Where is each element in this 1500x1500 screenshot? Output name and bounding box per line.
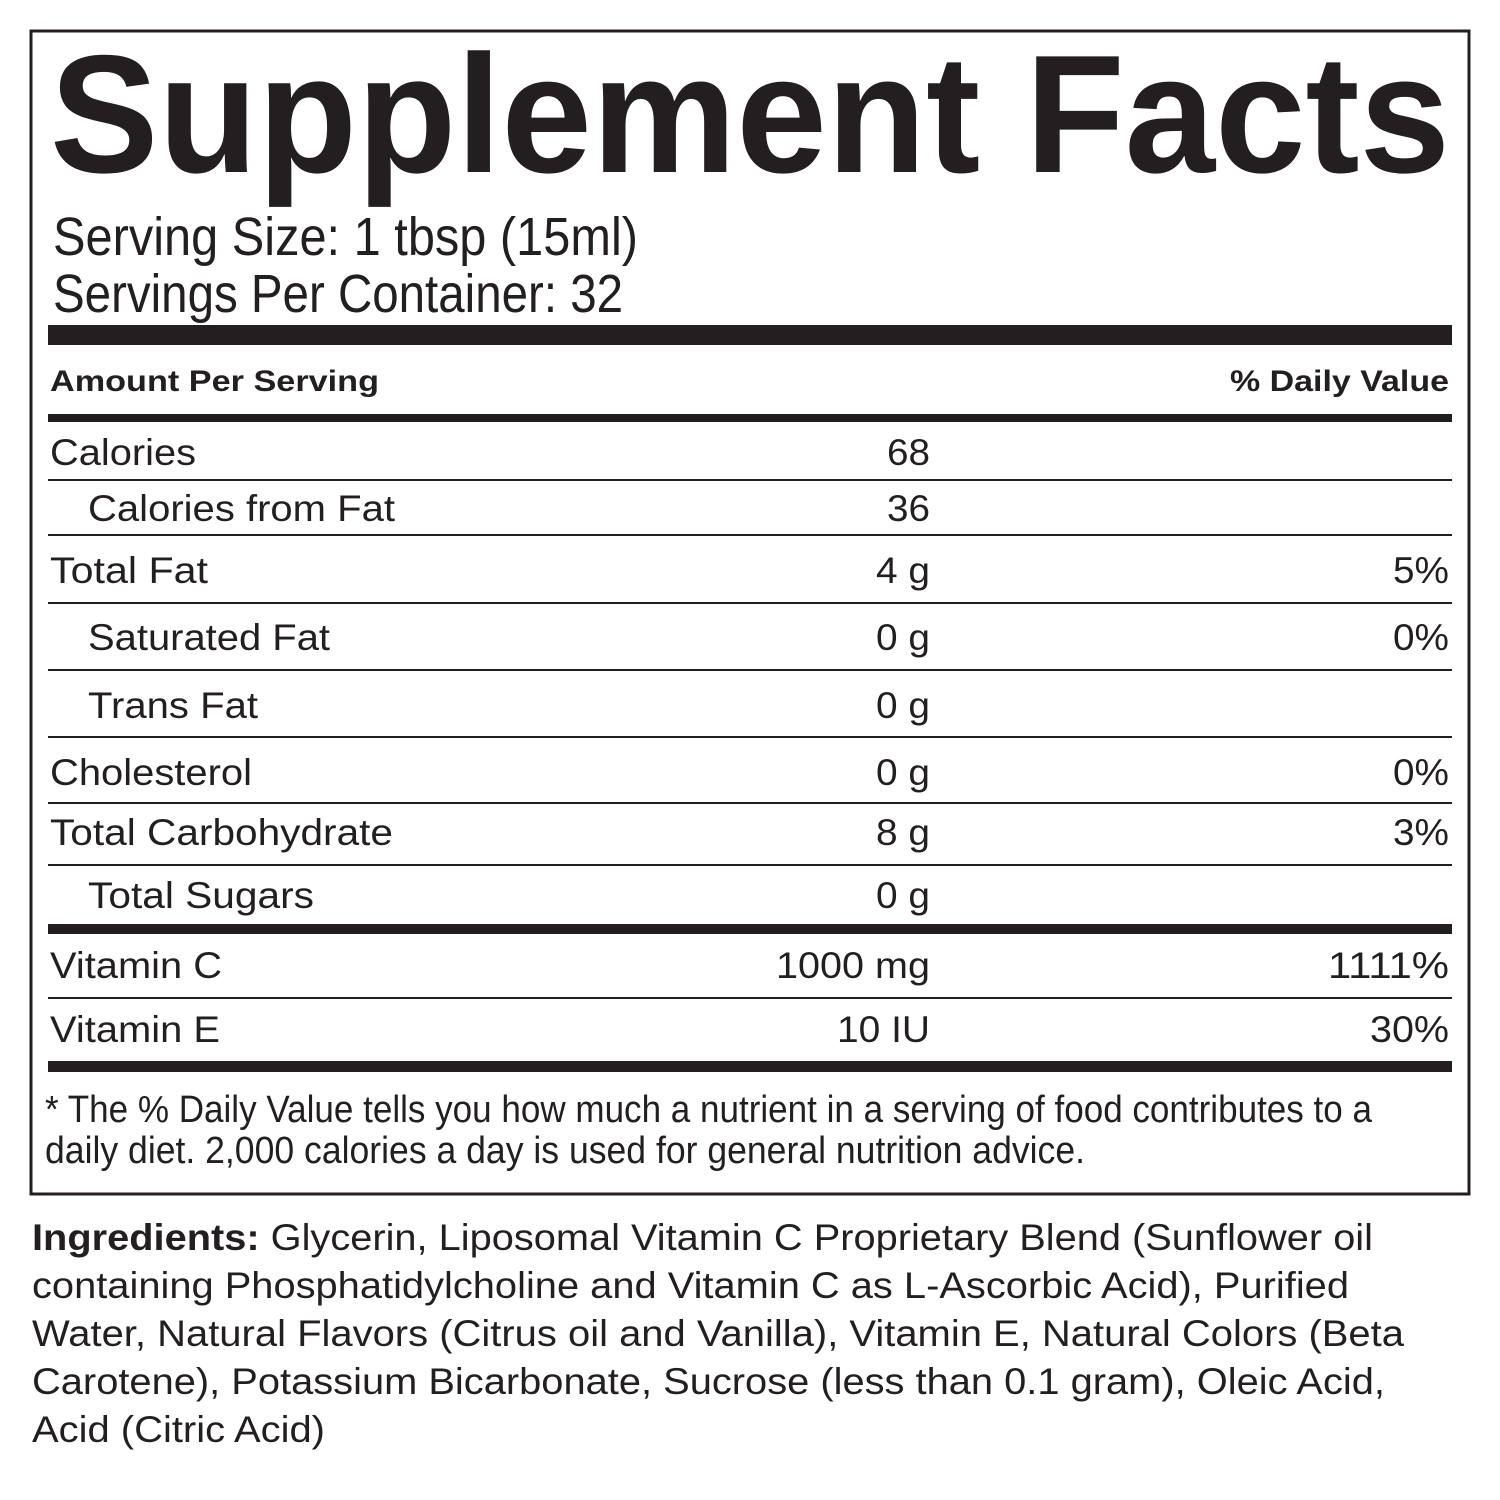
ingredients text: Carotene), Potassium Bicarbonate, Sucrose (less than 0.1 gram), Oleic Acid,: [32, 1361, 1385, 1402]
nutrient table: Total Carbohydrate: [50, 812, 393, 853]
nutrient table: 0 g: [876, 617, 930, 658]
column headers: Amount Per Serving: [50, 365, 379, 398]
ingredients text: Acid (Citric Acid): [32, 1409, 325, 1450]
nutrient table: 1000 mg: [776, 945, 930, 986]
nutrient table: Saturated Fat: [88, 617, 331, 658]
nutrient table: 1111%: [1328, 945, 1449, 986]
nutrient table: 8 g: [876, 812, 930, 853]
ingredients text: Ingredients: Glycerin, Liposomal Vitamin C Proprietary Blend (Sunflower oil: [32, 1217, 1373, 1258]
ingredients text: [32, 1217, 1404, 1450]
serving info: [53, 207, 638, 324]
nutrient table: 36: [887, 488, 930, 529]
nutrient table: 0%: [1393, 752, 1449, 793]
nutrient table: 68: [887, 432, 930, 473]
nutrient table: 3%: [1393, 812, 1449, 853]
footnote: * The % Daily Value tells you how much a nutrient in a serving of food contributes to a: [45, 1089, 1373, 1131]
nutrient table: 0 g: [876, 875, 930, 916]
footnote: daily diet. 2,000 calories a day is used for general nutrition advice.: [45, 1130, 1085, 1172]
title: Supplement Facts: [50, 20, 1450, 208]
nutrient table: 5%: [1393, 550, 1449, 591]
nutrient table: Calories: [50, 432, 196, 473]
serving info: Serving Size: 1 tbsp (15ml): [53, 207, 638, 267]
panel: supplement facts box: [31, 20, 1469, 1194]
nutrient table: 0%: [1393, 617, 1449, 658]
nutrient table: 30%: [1370, 1009, 1449, 1050]
footnote: [45, 1089, 1373, 1172]
nutrient table: Total Fat: [50, 550, 209, 591]
nutrient table: 10 IU: [837, 1009, 930, 1050]
nutrient table: 0 g: [876, 752, 930, 793]
nutrient table: Total Sugars: [88, 875, 314, 916]
column headers: [50, 365, 1449, 398]
ingredients text: Water, Natural Flavors (Citrus oil and Vanilla), Vitamin E, Natural Colors (Beta: [32, 1313, 1404, 1354]
nutrient table: Cholesterol: [50, 752, 252, 793]
nutrient table: 4 g: [876, 550, 930, 591]
nutrient table: Trans Fat: [88, 685, 259, 726]
column headers: % Daily Value: [1230, 365, 1449, 398]
nutrient table: Vitamin E: [50, 1009, 220, 1050]
nutrient table: Vitamin C: [50, 945, 222, 986]
nutrient table: 0 g: [876, 685, 930, 726]
nutrient table: [48, 432, 1452, 1050]
nutrient table: Calories from Fat: [88, 488, 396, 529]
serving info: Servings Per Container: 32: [53, 264, 623, 324]
ingredients text: containing Phosphatidylcholine and Vitamin C as L-Ascorbic Acid), Purified: [32, 1265, 1349, 1306]
